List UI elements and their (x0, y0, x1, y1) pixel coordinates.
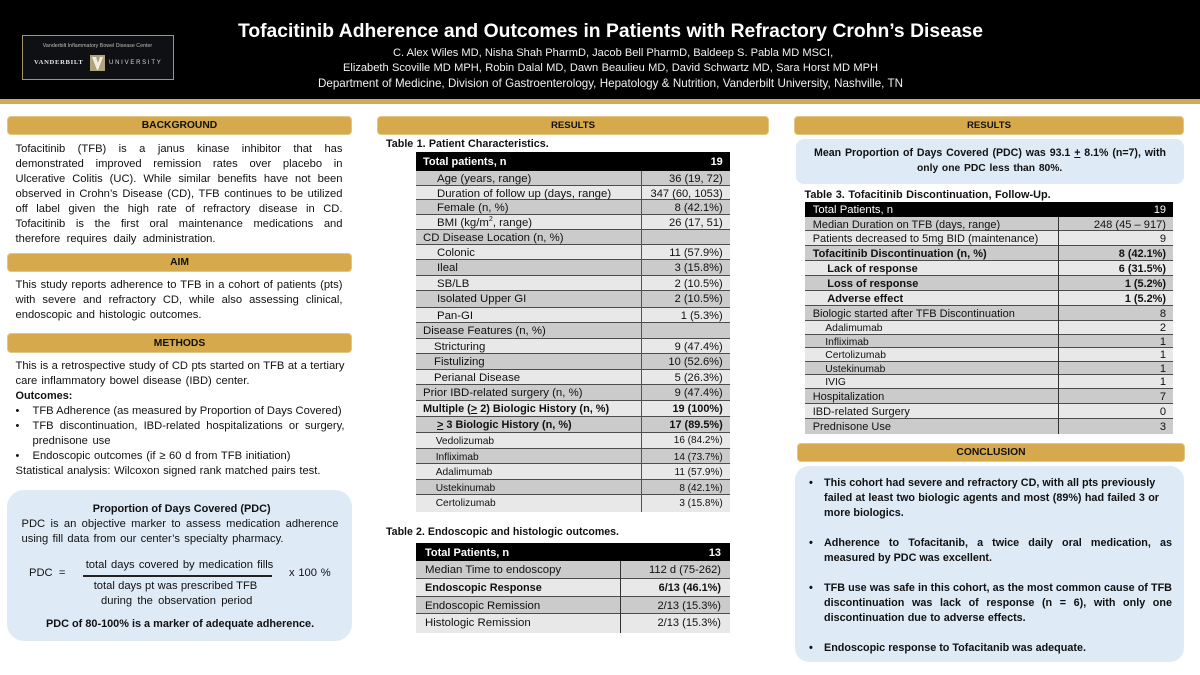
table 3: tofacitinib discontinuation and follow-up: Biologic started after TFB Discontinuation (813, 308, 1015, 320)
table 1: patient characteristics: 347 (60, 1053) (651, 188, 723, 200)
table 1: patient characteristics: 8 (42.1%) (675, 202, 723, 214)
table 3: tofacitinib discontinuation and follow-up: 8 (1160, 308, 1166, 320)
text block: background: Tofacitinib is the first oral maintenance medications and (16, 218, 342, 230)
table 1: patient characteristics: 2 (10.5%) (675, 278, 723, 290)
panel: proportion of days covered (7, 490, 352, 641)
table 1: patient characteristics: 2 (10.5%) (675, 293, 723, 305)
table 2: endoscopic and histologic outcomes: 6/13 (46.1%) (659, 582, 721, 594)
definition text: using fill data from our center’s specialty pharmacy. (22, 533, 284, 545)
logo caption: Vanderbilt Inflammatory Bowel Disease Center (43, 43, 152, 49)
panel: conclusion: • (809, 642, 813, 654)
table 2: endoscopic and histologic outcomes: 112 d (75-262) (649, 564, 721, 576)
table 1: patient characteristics: Pan-GI (437, 310, 473, 322)
callout: mean PDC (796, 139, 1184, 184)
header banner (0, 0, 1200, 104)
table 3: tofacitinib discontinuation and follow-up: Infliximab (825, 337, 869, 348)
table 3: tofacitinib discontinuation and follow-up: 0 (1160, 406, 1166, 418)
table 2: endoscopic and histologic outcomes: 2/13 (15.3%) (657, 600, 721, 612)
conclusion bullet 2: Adherence to Tofacitanib, a twice daily oral medication, as (824, 537, 1172, 549)
heading: aim (7, 253, 352, 272)
table 1: patient characteristics: 8 (42.1%) (679, 483, 723, 494)
panel: conclusion: • (809, 582, 813, 594)
table 2: endoscopic and histologic outcomes: Median Time to endoscopy (425, 564, 561, 576)
text block: aim (16, 279, 342, 321)
text block: methods: TFB discontinuation, IBD-related hospitalizations or surgery, (32, 420, 344, 432)
table 1: patient characteristics: 11 (57.9%) (675, 467, 723, 478)
conclusion bullet 1: failed at least two biologic agents and most (89%) had failed 3 or (824, 492, 1159, 504)
definition text (22, 518, 338, 545)
text block: methods: Endoscopic outcomes (if ≥ 60 d from TFB initiation) (32, 450, 290, 462)
table 1: patient characteristics: Female (n, %) (437, 202, 509, 214)
table 1: patient characteristics: 9 (47.4%) (675, 341, 723, 353)
icon: Vanderbilt V shield (90, 55, 105, 71)
conclusion bullet 3 (809, 582, 1172, 624)
table 3: tofacitinib discontinuation and follow-up: 248 (45 – 917) (1094, 219, 1166, 231)
panel: conclusion: • (809, 477, 813, 489)
table 1: patient characteristics: 3 (15.8%) (679, 498, 723, 509)
text block: methods (16, 360, 344, 477)
table 3: tofacitinib discontinuation and follow-up: Median Duration on TFB (days, range) (813, 219, 1000, 231)
formula denominator: total days pt was prescribed TFB (94, 580, 257, 592)
authors and affiliation: C. Alex Wiles MD, Nisha Shah PharmD, Jacob Bell PharmD, Baldeep S. Pabla MD MSCI, (393, 47, 833, 59)
conclusion bullet 1: more biologics. (824, 507, 904, 519)
table 1: patient characteristics: Adalimumab (436, 467, 492, 478)
table 3: tofacitinib discontinuation and follow-up: Prednisone Use (813, 421, 891, 433)
table 3: tofacitinib discontinuation and follow-up: IVIG (825, 377, 846, 388)
conclusion bullet 3: discontinuation due to adverse effects. (824, 612, 1026, 624)
table 1: patient characteristics: Prior IBD-related surgery (n, %) (423, 387, 583, 399)
table 2: endoscopic and histologic outcomes: Endoscopic Response (425, 582, 542, 594)
table 2 header row: 13 (709, 547, 721, 559)
table 1: patient characteristics: Disease Features (n, %) (423, 325, 546, 337)
table 1 caption: Table 1. Patient Characteristics. (386, 138, 549, 150)
table 2 caption: Table 2. Endoscopic and histologic outcomes. (386, 526, 619, 538)
callout text: Mean Proportion of Days Covered (PDC) was 93.1 + 8.1% (n=7), with (814, 147, 1166, 159)
heading: conclusion: CONCLUSION (956, 447, 1026, 458)
table 1: patient characteristics: CD Disease Location (n, %) (423, 232, 564, 244)
heading: aim: AIM (170, 257, 189, 268)
table 3: tofacitinib discontinuation and follow-up: 7 (1160, 391, 1166, 403)
conclusion bullet 2: measured by PDC was excellent. (824, 552, 992, 564)
table 2: endoscopic and histologic outcomes: Endoscopic Remission (425, 600, 540, 612)
text block: background: demonstrated improved remission rates over placebo in (16, 158, 342, 170)
title: Tofacitinib Adherence and Outcomes in Patients with Refractory Crohn’s Disease (238, 21, 983, 42)
table 1: patient characteristics: Infliximab (436, 452, 479, 463)
formula denominator (94, 580, 257, 607)
table 1: patient characteristics: 14 (73.7%) (674, 452, 723, 463)
table 1 header row: Total patients, n (423, 156, 507, 168)
table 3: tofacitinib discontinuation and follow-up: Tofacitinib Discontinuation (n, %) (813, 248, 987, 260)
logo wordmark: Vanderbilt: VANDERBILT (34, 59, 84, 66)
table 1: patient characteristics: 3 (15.8%) (675, 262, 723, 274)
text block: methods: • (16, 405, 19, 417)
table 1: patient characteristics: > 3 Biologic History (n, %) (437, 419, 572, 431)
heading: conclusion (797, 443, 1185, 462)
authors and affiliation: Department of Medicine, Division of Gastroenterology, Hepatology & Nutrition, Vanderbilt University, Nashville, TN (318, 77, 903, 90)
table 3: tofacitinib discontinuation and follow-up: IBD-related Surgery (813, 406, 910, 418)
table 1: patient characteristics: Age (years, range) (437, 173, 531, 185)
table 3: tofacitinib discontinuation and follow-up: Patients decreased to 5mg BID (maintenance) (813, 233, 1038, 245)
authors and affiliation (318, 47, 903, 90)
table 1: patient characteristics: Ileal (437, 262, 458, 274)
table 1 header row (416, 152, 730, 171)
formula denominator: during the observation period (101, 595, 252, 607)
table 2 header row (416, 543, 730, 561)
table 3: tofacitinib discontinuation and follow-up: Hospitalization (813, 391, 884, 403)
heading: methods (7, 333, 352, 353)
table 2: endoscopic and histologic outcomes: 2/13 (15.3%) (657, 617, 721, 629)
heading: results (right) (794, 116, 1184, 135)
table 3 caption: Table 3. Tofacitinib Discontinuation, Follow-Up. (804, 188, 1051, 200)
table 3: tofacitinib discontinuation and follow-up: Loss of response (827, 278, 918, 290)
formula left side: PDC = (29, 567, 65, 579)
table 2 header row: Total Patients, n (425, 547, 509, 559)
text block: background: Tofacitinib (TFB) is a janus kinase inhibitor that has (16, 143, 342, 155)
definition text: PDC is an objective marker to assess medication adherence (22, 518, 338, 530)
table 3: tofacitinib discontinuation and follow-up: 1 (5.2%) (1125, 278, 1166, 290)
panel: conclusion: • (809, 537, 813, 549)
heading: results (middle) (377, 116, 769, 134)
logo wordmark: University: UNIVERSITY (109, 60, 163, 66)
text block: methods: TFB Adherence (as measured by Proportion of Days Covered) (32, 405, 342, 417)
authors and affiliation: Elizabeth Scoville MD MPH, Robin Dalal MD, Dawn Beaulieu MD, David Schwartz MD, Sara Horst MD MPH (343, 62, 878, 74)
text block: aim: with severe and refractory CD, while also assessing clinical, (16, 294, 342, 306)
table 2: endoscopic and histologic outcomes: Histologic Remission (425, 617, 531, 629)
formula multiplier: x 100 % (289, 567, 331, 579)
table 3: tofacitinib discontinuation and follow-up: Adalimumab (825, 323, 883, 334)
table 1: patient characteristics: Duration of follow up (days, range) (437, 188, 611, 200)
text block: background: Ulcerative Colitis (UC). While similar benefits have not been (16, 173, 342, 185)
text block: aim: endoscopic and histologic outcomes. (16, 309, 202, 321)
panel heading: Proportion of Days Covered (PDC) (93, 503, 271, 515)
table 1: patient characteristics: Perianal Disease (434, 372, 520, 384)
table 1: patient characteristics: Fistulizing (434, 356, 485, 368)
table 3: tofacitinib discontinuation and follow-up: 3 (1160, 421, 1166, 433)
text block: methods: Outcomes: (16, 390, 72, 402)
conclusion bullet 3: discontinuation was lack of response (n = 6), with only one (824, 597, 1172, 609)
table 1: patient characteristics: Stricturing (434, 341, 485, 353)
table 1: patient characteristics: 16 (84.2%) (674, 435, 723, 446)
table 3: tofacitinib discontinuation and follow-up: 1 (1160, 349, 1166, 361)
callout text (814, 147, 1166, 174)
table 1: patient characteristics: 10 (52.6%) (668, 356, 723, 368)
conclusion bullet 1 (809, 477, 1159, 519)
heading: background (7, 116, 352, 135)
heading: background: BACKGROUND (142, 120, 217, 131)
text block: methods: This is a retrospective study of CD pts started on TFB at a tertiary (16, 360, 344, 372)
table 1: patient characteristics: Certolizumab (436, 498, 496, 509)
table 1: patient characteristics: Multiple (> 2) Biologic History (n, %) (423, 403, 609, 415)
text block: methods: • (16, 450, 19, 462)
table 1: patient characteristics: Ustekinumab (436, 483, 495, 494)
table 1: patient characteristics: Colonic (437, 247, 475, 259)
table 3: tofacitinib discontinuation and follow-up: Lack of response (827, 263, 918, 275)
table 1: patient characteristics (416, 152, 730, 512)
table 3 header row: 19 (1154, 204, 1166, 216)
text block: methods: • (16, 420, 19, 432)
table 1: patient characteristics: 17 (89.5%) (669, 419, 723, 431)
text block: methods: Statistical analysis: Wilcoxon signed rank matched pairs test. (16, 465, 320, 477)
panel: conclusion (795, 466, 1184, 662)
table 1: patient characteristics: Isolated Upper GI (437, 293, 526, 305)
table 1: patient characteristics: 26 (17, 51) (669, 217, 723, 229)
table 1: patient characteristics: 9 (47.4%) (675, 387, 723, 399)
table 3 header row (805, 202, 1173, 217)
table 3 header row: Total Patients, n (813, 204, 893, 216)
conclusion bullet 3: TFB use was safe in this cohort, as the most common cause of TFB (824, 582, 1172, 594)
heading: methods: METHODS (154, 338, 205, 349)
table 1: patient characteristics: SB/LB (437, 278, 469, 290)
table 3: tofacitinib discontinuation and follow-up (805, 202, 1173, 434)
conclusion bullet 4: Endoscopic response to Tofacitanib was adequate. (824, 642, 1086, 654)
table 3: tofacitinib discontinuation and follow-up: 8 (42.1%) (1119, 248, 1166, 260)
text block: methods: care inflammatory bowel disease (IBD) center. (16, 375, 250, 387)
table 3: tofacitinib discontinuation and follow-up: 9 (1160, 233, 1166, 245)
table 3: tofacitinib discontinuation and follow-up: Certolizumab (825, 350, 886, 361)
table 3: tofacitinib discontinuation and follow-up: Ustekinumab (825, 364, 885, 375)
text block: aim: This study reports adherence to TFB in a cohort of patients (pts) (16, 279, 342, 291)
table 3: tofacitinib discontinuation and follow-up: 1 (1160, 336, 1166, 348)
conclusion bullet 2 (809, 537, 1172, 564)
text block: methods: prednisone use (32, 435, 110, 447)
table 3: tofacitinib discontinuation and follow-up: 1 (5.2%) (1125, 293, 1166, 305)
table 2: endoscopic and histologic outcomes (416, 543, 730, 633)
table 3: tofacitinib discontinuation and follow-up: Adverse effect (827, 293, 903, 305)
table 3: tofacitinib discontinuation and follow-up: 6 (31.5%) (1119, 263, 1166, 275)
callout text: only one PDC less than 80%. (917, 163, 1062, 174)
text block: background: observed in Crohn’s Disease (CD), TFB continues to be utilized (16, 188, 342, 200)
table 1: patient characteristics: 36 (19, 72) (669, 173, 723, 185)
logo: Vanderbilt Inflammatory Bowel Disease Center (22, 35, 174, 80)
table 1: patient characteristics: 5 (26.3%) (675, 372, 723, 384)
text block: background: therefore requires daily administration. (16, 233, 216, 245)
text block: background: off label given the high rate of refractory disease in CD. (16, 203, 342, 215)
table 1: patient characteristics: 19 (100%) (672, 403, 723, 415)
table 3: tofacitinib discontinuation and follow-up: 2 (1160, 322, 1166, 334)
adherence threshold: PDC of 80-100% is a marker of adequate adherence. (46, 618, 314, 630)
text block: background (16, 143, 342, 245)
table 1: patient characteristics: BMI (kg/m2, range) (437, 216, 532, 229)
table 3: tofacitinib discontinuation and follow-up: 1 (1160, 363, 1166, 375)
table 1 header row: 19 (711, 156, 723, 168)
table 3: tofacitinib discontinuation and follow-up: 1 (1160, 376, 1166, 388)
formula (29, 559, 331, 607)
table 1: patient characteristics: Vedolizumab (436, 436, 494, 447)
table 1: patient characteristics: 11 (57.9%) (669, 247, 723, 259)
table 1: patient characteristics: 1 (5.3%) (681, 310, 723, 322)
formula numerator: total days covered by medication fills (86, 559, 273, 571)
conclusion bullet 1: This cohort had severe and refractory CD, with all pts previously (824, 477, 1155, 489)
heading: results (middle): RESULTS (551, 120, 595, 130)
heading: results (right): RESULTS (967, 120, 1011, 131)
